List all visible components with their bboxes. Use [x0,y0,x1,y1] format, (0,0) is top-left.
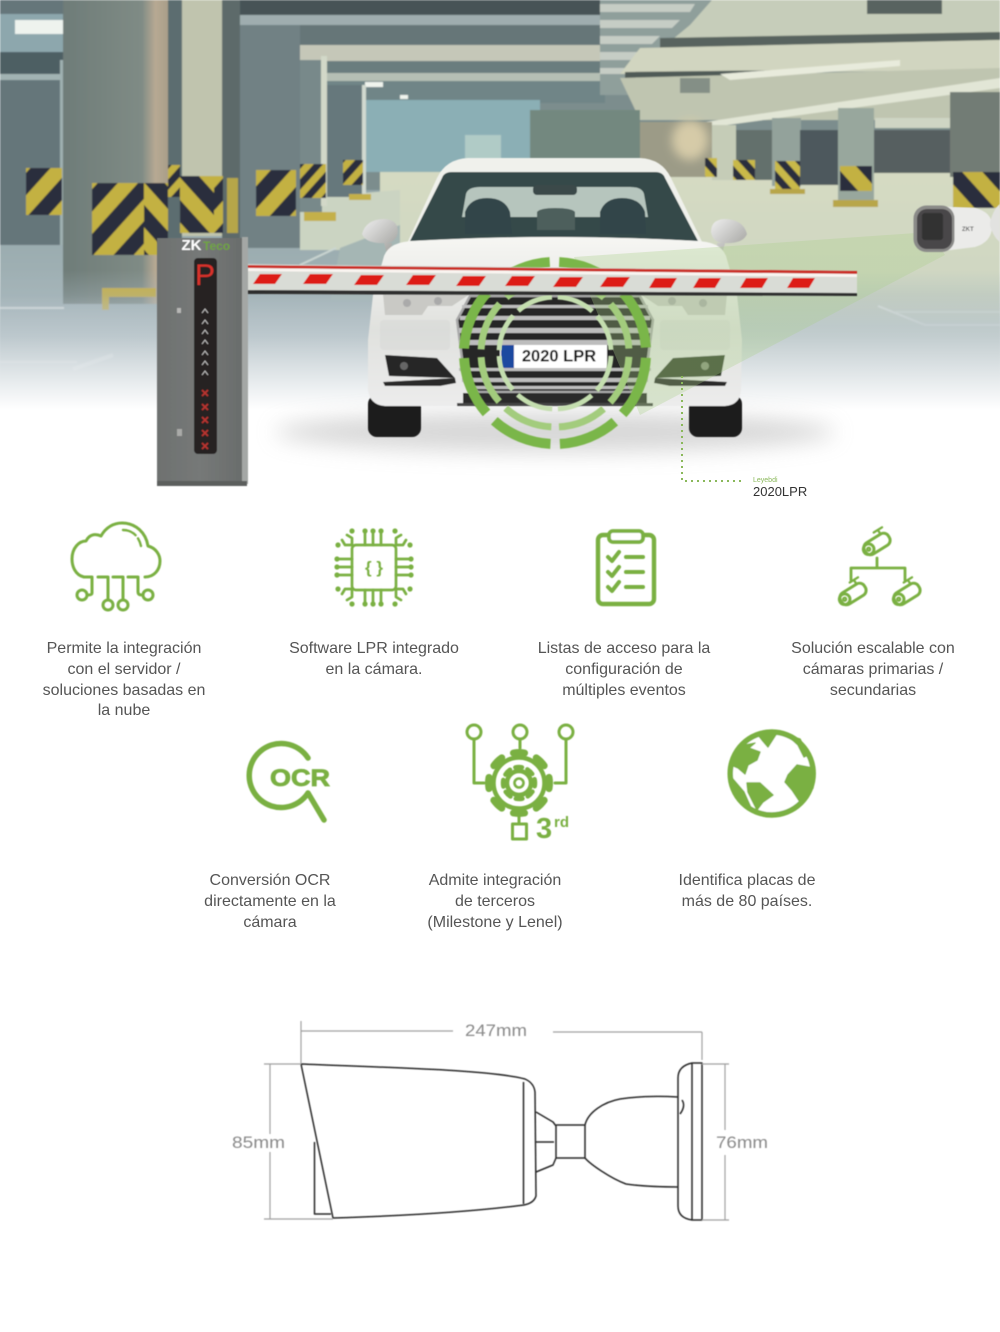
dimension: base 76mm [702,1064,768,1220]
green camera field of view cone [574,232,945,415]
front grille [457,296,653,406]
dotted leader line [682,376,743,481]
text: third party integration: de terceros [455,893,535,910]
text: access lists: configuración de [565,661,683,678]
text: OCR conversion: Conversión OCR [210,872,330,889]
dimension: length [301,1021,702,1063]
yellow stands [102,288,156,297]
leader label [753,477,807,499]
LED display [194,258,217,454]
leader label: Leyebdi [753,477,778,484]
text: countries: más de 80 países. [682,893,812,910]
text: countries: Identifica placas de [679,872,816,889]
icon: third party gear [467,725,573,845]
text: scalable solution: cámaras primarias / [803,661,944,678]
bullet camera at right [914,204,1000,252]
camera dimension drawing [232,1021,768,1220]
barrier arm [243,264,857,296]
headlights [383,294,727,315]
ZKTeco logo [182,237,230,254]
side shading [380,320,730,350]
ceiling left [240,0,610,15]
text: cloud integration: Permite la integración [47,640,201,657]
text: scalable solution: secundarias [830,682,916,699]
bluish floor tone [0,270,1000,410]
hazard blocks [26,168,62,215]
back wall and bays [365,100,540,172]
red stripes [253,274,815,288]
text: scalable solution: Solución escalable con [791,640,955,657]
car cabin with windshield [404,158,706,250]
text: cloud integration: con el servidor / [68,661,181,678]
text: third party integration: Admite integración [429,872,561,889]
text: access lists: múltiples eventos [562,682,686,699]
text: cloud integration: la nube [98,702,150,719]
ZKTeco logo: ZK [182,237,202,254]
car body and bumper [368,237,742,406]
left wall [0,0,64,245]
wheels [368,395,742,437]
text: LPR software: en la cámara. [326,661,422,678]
ground shadow under the car [275,412,835,452]
license plate [500,345,607,368]
floor markings [0,307,64,309]
LED display: P [195,259,215,292]
icon: primary and secondary cameras [834,527,922,608]
icon: cloud network [72,523,160,610]
license plate: 2020 LPR [522,348,596,366]
car front view [362,158,747,437]
ceiling right with ducts [600,0,712,95]
leader label: 2020LPR [753,484,807,499]
icon: third party gear: 3 [536,813,552,845]
icon: third party gear: rd [554,814,569,831]
side mirrors [362,219,747,254]
camera outline [301,1063,702,1220]
barrier post with parking display [157,237,248,486]
background photo: underground parking garage [0,0,1000,410]
icon: OCR magnifier: OCR [270,765,330,792]
icon: OCR magnifier [249,744,330,820]
fade of the photo into white [0,295,1000,420]
dimension: height 85mm [232,1064,333,1219]
bullet camera at right: ZKT [962,227,974,233]
text: OCR conversion: directamente en la [204,893,336,910]
icon: processor chip [334,528,414,607]
fog lamps [383,355,727,386]
icon: processor chip: { } [365,558,383,577]
text: cloud integration: soluciones basadas en [43,682,205,699]
icon: checklist clipboard [598,531,654,604]
dimension: base 76mm: 76mm [716,1133,768,1152]
green scan rings [464,262,646,444]
pillars [168,0,182,240]
text: third party integration: (Milestone y Lenel) [427,914,563,931]
dimension: height 85mm: 85mm [232,1133,285,1152]
ZKTeco logo: Teco [203,239,230,253]
text: OCR conversion: cámara [243,914,297,931]
text: access lists: Listas de acceso para la [538,640,710,657]
dimension: length: 247mm [465,1021,527,1040]
text: LPR software: Software LPR integrado [289,640,459,657]
icon: globe [730,732,813,815]
